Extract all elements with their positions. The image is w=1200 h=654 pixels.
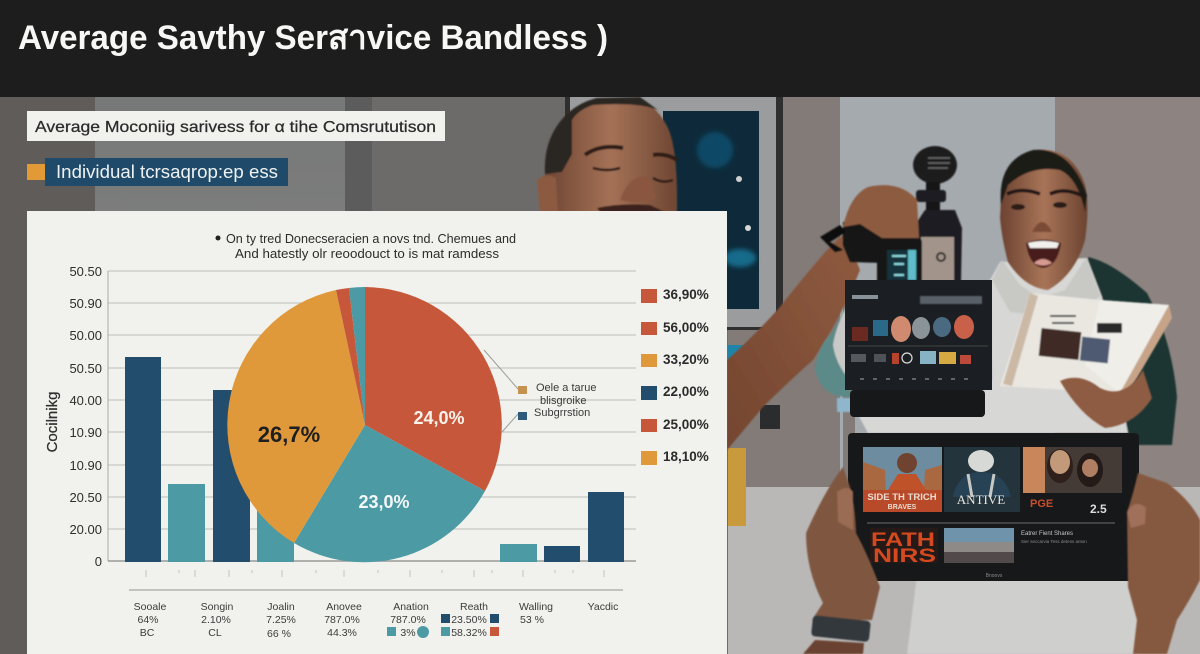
x axis category table: Sooale: [134, 601, 167, 613]
framed poster: [565, 97, 783, 330]
poster 5: [944, 528, 1014, 563]
x axis category table: 787.0%: [324, 614, 360, 626]
x axis category table: 787.0%: [390, 614, 426, 626]
legend tag: individual: Individual tcrsaqrop:ep ess: [56, 161, 278, 182]
hands holding tablet: [803, 467, 1200, 654]
y axis labels: 10.90: [69, 458, 102, 473]
right legend: 33,20%: [663, 352, 709, 367]
x axis category table: Songin: [201, 601, 234, 613]
tablet captions: Eatrer Fient Shares: [1021, 531, 1073, 537]
pie callouts: [484, 350, 597, 432]
poster 4: [870, 528, 938, 567]
tablet captions: [986, 531, 1087, 579]
legend tag: individual: [27, 158, 288, 186]
y axis labels: 50.50: [69, 361, 102, 376]
right legend: 25,00%: [663, 417, 709, 432]
poster 1: BRAVES: [888, 504, 917, 511]
x axis category table: CL: [208, 627, 222, 639]
person right: jacket and hoodie: [815, 257, 1177, 445]
x axis category table: 64%: [137, 614, 159, 626]
x axis category table: [134, 601, 618, 640]
x axis baseline: [129, 589, 623, 591]
poster 4: FATH: [871, 530, 935, 551]
poster 1: [863, 447, 942, 512]
open magazine: [1000, 293, 1172, 395]
top title bar: [0, 0, 1200, 97]
y axis labels: 40.00: [69, 393, 102, 408]
pie label teal: 23,0%: [358, 492, 410, 512]
y axis labels: 50.50: [69, 264, 102, 279]
y axis labels: 20.50: [69, 490, 102, 505]
y axis gridlines: [108, 271, 636, 561]
y axis labels: 20.00: [69, 522, 102, 537]
y axis labels: 0: [95, 554, 102, 569]
chart panel: [27, 211, 727, 654]
title: Average Savthy Serสาvice Bandless ): [18, 19, 608, 57]
person left: raised arm: [727, 232, 860, 450]
pie chart: [227, 287, 502, 562]
y axis labels: 50.00: [69, 328, 102, 343]
pie callouts: blisgroike: [540, 395, 586, 407]
x axis category table: 3%: [400, 627, 416, 639]
y axis labels: 10.90: [69, 425, 102, 440]
x axis category table: Joalin: [267, 601, 295, 613]
right legend: [641, 287, 709, 465]
hand holding magazine: [1060, 370, 1152, 428]
x axis category table: 23.50%: [451, 614, 487, 626]
bar chart: [125, 357, 624, 562]
right legend: 36,90%: [663, 287, 709, 302]
chart heading: [216, 231, 516, 261]
x axis category table: Anovee: [326, 601, 362, 613]
poster 1: SIDE TH TRICH: [867, 492, 937, 503]
streaming screen on camera: [845, 280, 992, 417]
handheld camera rig: [820, 146, 962, 303]
x axis category table: 66 %: [267, 628, 291, 640]
pie label red: 24,0%: [413, 408, 465, 428]
poster 2: ANTIVE: [957, 492, 1005, 507]
pie label orange: 26,7%: [258, 422, 320, 447]
x axis category table: Reath: [460, 601, 488, 613]
x axis category table: 44.3%: [327, 627, 357, 639]
x axis category table: Anation: [393, 601, 429, 613]
chart heading: On ty tred Donecseracien a novs tnd. Chemues and: [226, 231, 516, 246]
x axis category table: 7.25%: [266, 614, 296, 626]
x axis category table: BC: [140, 627, 155, 639]
tablet: [848, 433, 1139, 581]
subtitle label: Average Moconiig sarivess for α tihe Comsrututison: [35, 119, 436, 136]
tablet captions: Sier seccarvia Tess detess anton: [1021, 539, 1087, 544]
subtitle label: [27, 111, 445, 141]
x axis category table: 58.32%: [451, 627, 487, 639]
pie callouts: Oele a tarue: [536, 382, 597, 394]
right legend: 22,00%: [663, 384, 709, 399]
tablet captions: Bnoovs: [986, 573, 1003, 579]
person right: head: [1000, 150, 1088, 290]
x axis category table: 53 %: [520, 614, 544, 626]
second frame and yellow poster: [728, 345, 780, 526]
y axis labels: [69, 264, 102, 569]
x axis category table: Walling: [519, 601, 553, 613]
x axis ticks: [146, 570, 604, 577]
t-shirt: [907, 575, 1143, 654]
poster 4: NIRS: [873, 546, 936, 567]
right legend: 18,10%: [663, 449, 709, 464]
x axis category table: Yacdic: [588, 601, 618, 613]
poster 3: 2.5: [1090, 502, 1107, 516]
chart heading: And hatestly olr reoodouct to is mat ramdess: [235, 246, 500, 261]
person left: head: [537, 97, 677, 212]
y axis title: Cocilnikg: [44, 392, 61, 452]
poster 3: [1023, 447, 1122, 516]
poster 3: PGE: [1030, 498, 1053, 510]
right legend: 56,00%: [663, 320, 709, 335]
pie callouts: Subgrrstion: [534, 407, 590, 419]
y axis labels: 50.90: [69, 296, 102, 311]
poster 2: [944, 447, 1020, 512]
x axis category table: 2.10%: [201, 614, 231, 626]
